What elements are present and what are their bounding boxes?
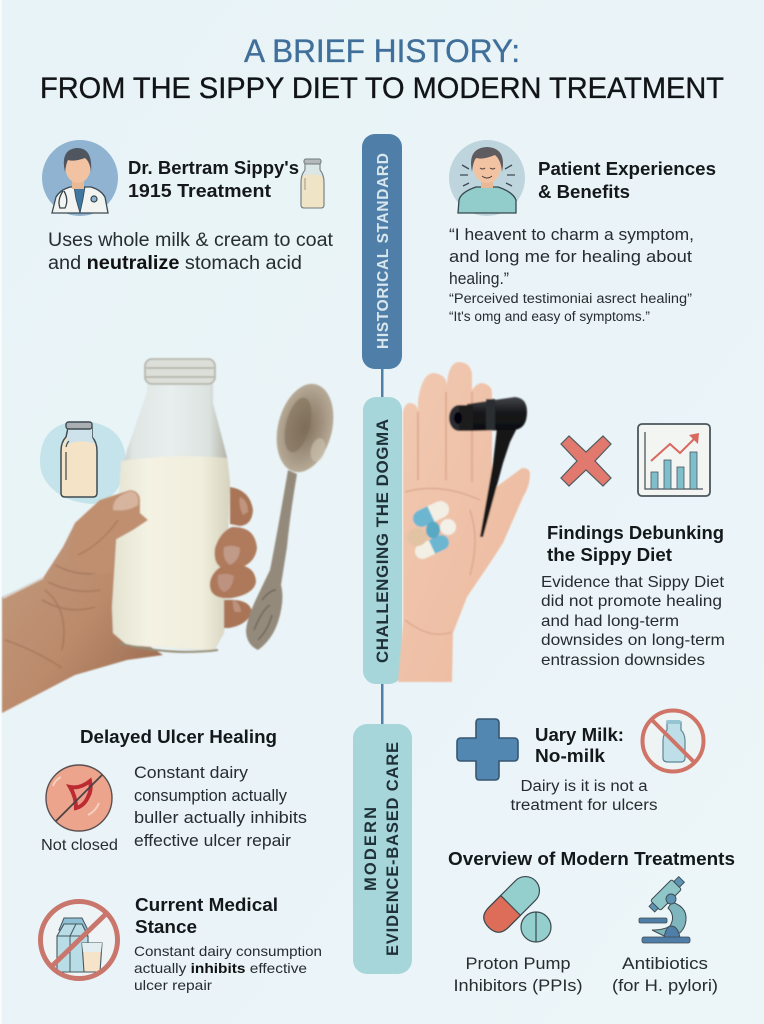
photo: hand holding milk bottle [2, 359, 342, 713]
body text [48, 230, 334, 274]
body text: Constant dairy [134, 764, 249, 782]
icon: no dairy [40, 902, 118, 978]
body text: Dairy is it is not a [520, 778, 648, 795]
icon: bar chart trend [638, 424, 710, 496]
testimonial quotes: “It's omg and easy of symptoms.” [449, 309, 650, 324]
panel: Sippy treatment [42, 140, 334, 274]
thumb [70, 490, 148, 574]
body text [134, 764, 307, 850]
spoon [246, 378, 342, 650]
title: FROM THE SIPPY DIET TO MODERN TREATMENT [40, 72, 724, 105]
heading: & Benefits [538, 182, 630, 202]
panel: findings debunking: did not promote healing [541, 593, 722, 610]
panel: delayed ulcer healing: Delayed Ulcer Healing [80, 727, 277, 747]
testimonial quotes [449, 226, 694, 324]
heading [535, 725, 624, 766]
icon: microscope [639, 874, 690, 943]
testimonial quotes: “Perceived testimoniai asrect healing” [449, 291, 692, 306]
heading: Current Medical [135, 895, 278, 915]
heading: Dr. Bertram Sippy's [128, 158, 299, 178]
icon: ulcer [46, 765, 112, 831]
label: Proton Pump [466, 954, 570, 973]
heading: Stance [135, 917, 197, 937]
panel: findings debunking: the Sippy Diet [547, 545, 672, 565]
panel: findings debunking: downsides on long-term [541, 632, 725, 649]
pills [407, 498, 456, 561]
icon: pills [479, 871, 551, 942]
label: Inhibitors (PPIs) [454, 976, 582, 995]
body text: Uses whole milk & cream to coat [48, 230, 334, 251]
icon: doctor [42, 140, 118, 216]
icon: patient [449, 140, 525, 216]
testimonial quotes: healing.” [449, 270, 509, 288]
timeline pill: modern evidence-based care [353, 724, 412, 974]
hand [398, 362, 530, 682]
label [612, 954, 718, 995]
photo: open hand with pills and otoscope [398, 362, 530, 682]
otoscope [449, 397, 527, 537]
heading [135, 895, 278, 937]
heading: 1915 Treatment [128, 181, 271, 201]
icon: milk bottle small [301, 159, 324, 208]
heading: Uary Milk: [535, 725, 624, 745]
timeline pill: challenging the dogma [363, 397, 402, 684]
body text: ulcer repair [134, 977, 212, 993]
title: A BRIEF HISTORY: [244, 33, 520, 69]
panel: findings debunking [541, 523, 725, 669]
panel: findings debunking: Evidence that Sippy Diet [541, 574, 725, 591]
label [454, 954, 582, 995]
timeline pill: modern evidence-based care: EVIDENCE-BASED CARE [384, 742, 402, 956]
testimonial quotes: and long me for healing about [449, 248, 692, 266]
body text: actually inhibits effective [134, 960, 307, 976]
body text: and neutralize stomach acid [48, 253, 302, 274]
panel: delayed ulcer healing [41, 727, 307, 854]
panel: patient experiences [449, 140, 716, 324]
body text: treatment for ulcers [510, 797, 658, 814]
heading: Patient Experiences [538, 159, 716, 179]
label: (for H. pylori) [612, 976, 718, 995]
title [40, 33, 724, 105]
heading [128, 158, 299, 201]
icon: milk bottle with blob [40, 421, 126, 504]
icon: red cross mark [561, 436, 611, 486]
icon: medical cross [457, 719, 518, 780]
panel: current medical stance [40, 895, 322, 993]
body text [510, 778, 658, 814]
panel: findings debunking: entrassion downsides [541, 652, 705, 669]
timeline pill: challenging the dogma: CHALLENGING THE DOGMA [373, 419, 392, 663]
panel: no milk [457, 710, 704, 814]
panel: findings debunking: Findings Debunking [547, 523, 724, 543]
label: Antibiotics [622, 954, 708, 973]
fingers [230, 487, 253, 526]
icon caption: Not closed [41, 837, 118, 854]
heading [538, 159, 716, 202]
heading: Overview of Modern Treatments [448, 849, 735, 869]
timeline pill: historical standard: HISTORICAL STANDARD [375, 153, 392, 349]
timeline pill: historical standard [362, 134, 402, 369]
body text: effective ulcer repair [134, 832, 292, 850]
testimonial quotes: “I heavent to charm a symptom, [449, 226, 694, 244]
timeline connector [381, 365, 384, 728]
icon: no milk bottle [642, 710, 704, 772]
body text: consumption actually [134, 787, 288, 805]
body text: Constant dairy consumption [134, 943, 322, 959]
body text: buller actually inhibits [134, 809, 307, 827]
arm and palm [2, 495, 163, 713]
heading: No-milk [535, 746, 606, 766]
timeline pill: modern evidence-based care: MODERN [362, 807, 380, 891]
body text [134, 943, 322, 993]
bottle [112, 380, 230, 652]
panel: findings debunking: and had long-term [541, 613, 679, 630]
panel: overview of modern treatments [448, 849, 735, 995]
